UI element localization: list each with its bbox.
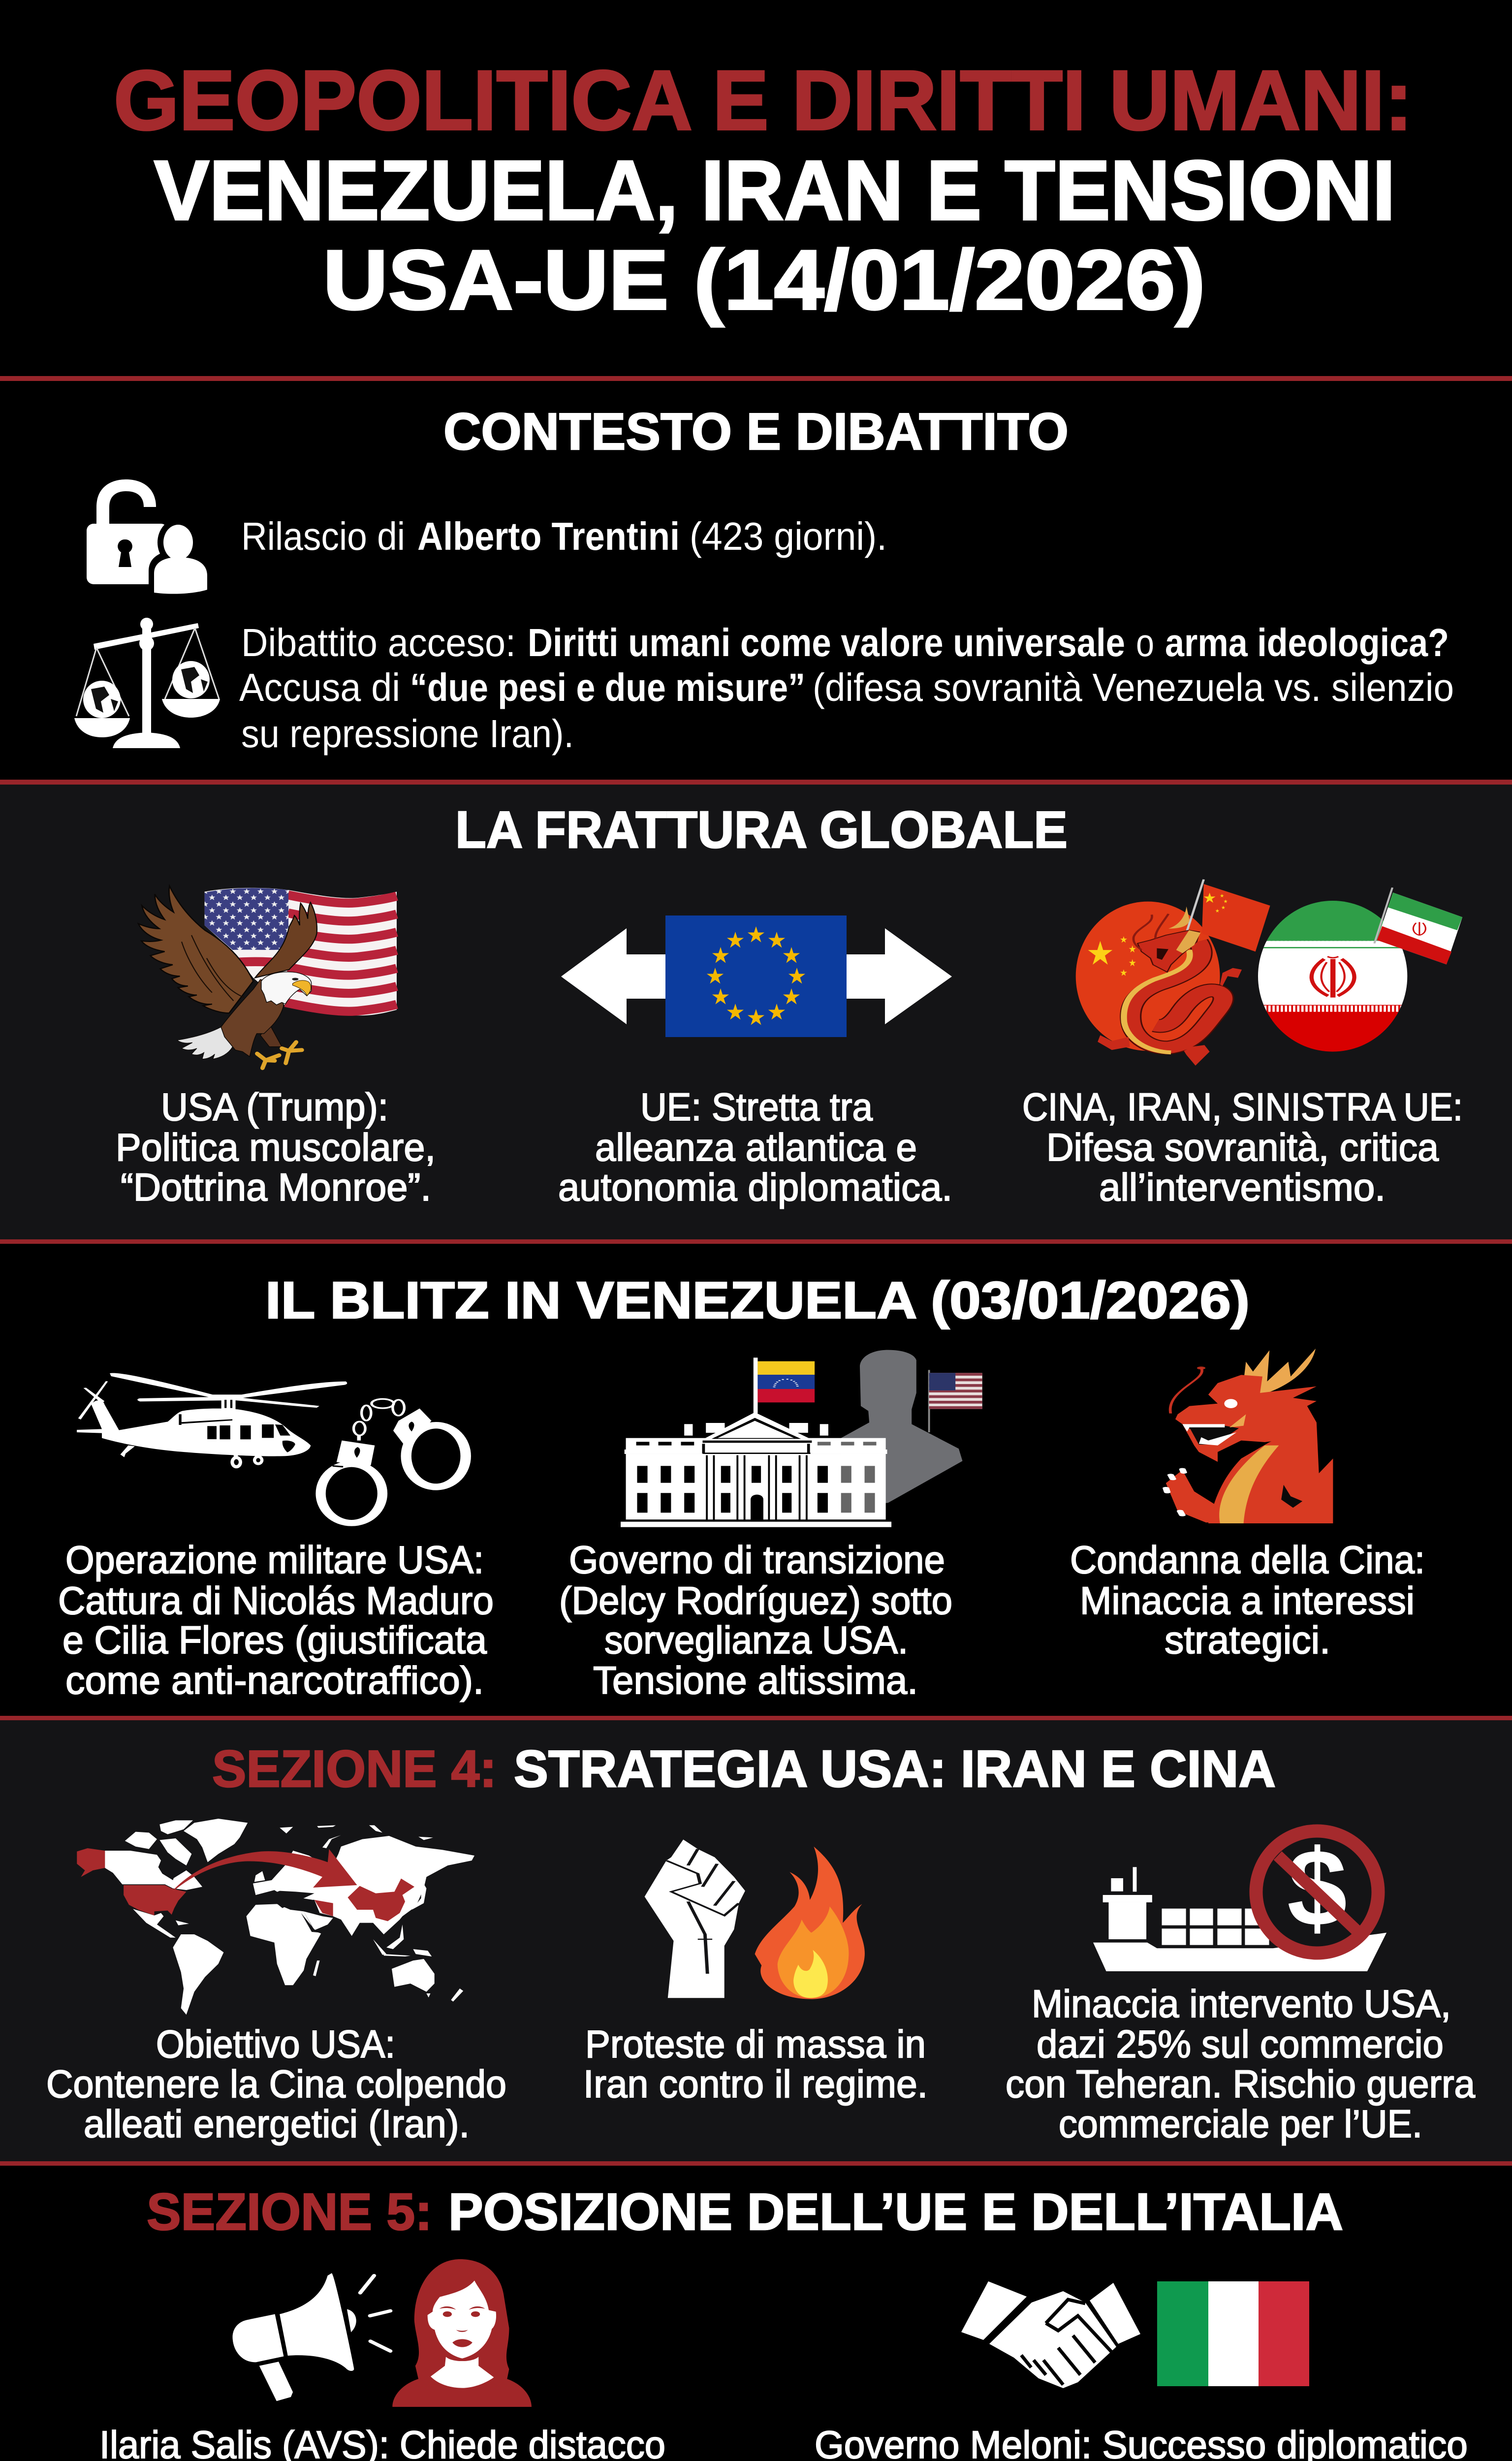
icon: open lock with person [87, 479, 213, 596]
icon: China dragon and Iran flags [1076, 880, 1462, 1066]
text: obiettivo USA: alleati energetici (Iran). [84, 2102, 470, 2145]
text: dibattito: Diritti umani come valore universale [528, 621, 1125, 664]
text: obiettivo USA [46, 2022, 506, 2145]
text: minaccia intervento: Minaccia intervento USA, [1032, 1982, 1451, 2025]
text: UE: autonomia diplomatica. [558, 1165, 952, 1209]
text: Cina Iran: CINA, IRAN, SINISTRA UE: [1022, 1085, 1463, 1129]
text: USA: USA (Trump): [161, 1085, 388, 1129]
text: UE: UE: Stretta tra [640, 1085, 873, 1129]
panel: contesto e dibattito [0, 381, 1512, 780]
heading: sezione 5: SEZIONE 5: [147, 2183, 432, 2241]
icon: helicopter and handcuffs [77, 1373, 466, 1523]
text: governo di transizione [559, 1538, 952, 1702]
title line 3: USA-UE (14/01/2026) [323, 233, 1205, 327]
text: governo di transizione: Tensione altissima. [593, 1658, 918, 1702]
text: condanna Cina [1070, 1538, 1425, 1662]
text: minaccia intervento: commerciale per l’UE. [1059, 2102, 1422, 2145]
text: UE [558, 1085, 952, 1209]
text: dibattito [239, 621, 1454, 756]
icon: scales with globes [74, 618, 220, 748]
panel: posizione UE e Italia [0, 2166, 1512, 2461]
text: governo di transizione: (Delcy Rodríguez) sotto [559, 1578, 952, 1622]
icon: Italian flag [1157, 2281, 1309, 2386]
text: operazione: e Cilia Flores (giustificata [63, 1618, 487, 1662]
heading: frattura: LA FRATTURA GLOBALE [455, 801, 1068, 859]
text: rilascio: Rilascio di [241, 514, 405, 558]
panel: title [114, 53, 1413, 327]
icon: container ship with prohibited dollar [1093, 1827, 1386, 1971]
icon: red dragon [1166, 1349, 1333, 1523]
text: proteste: Proteste di massa in [585, 2022, 926, 2066]
text: obiettivo USA: Obiettivo USA: [156, 2022, 395, 2066]
heading: blitz: IL BLITZ IN VENEZUELA (03/01/2026) [265, 1271, 1250, 1329]
title line 2: VENEZUELA, IRAN E TENSIONI [154, 143, 1395, 238]
text: UE: alleanza atlantica e [595, 1125, 917, 1169]
text: Cina Iran [1022, 1085, 1463, 1209]
icon: raised fist and flame [645, 1839, 865, 1999]
icon: world map with arrow [77, 1819, 474, 2015]
text: governo di transizione: Governo di transizione [569, 1538, 945, 1581]
text: governo di transizione: sorveglianza USA. [604, 1618, 908, 1662]
text: rilascio: (423 giorni). [690, 514, 887, 558]
text: dibattito: “due pesi e due misure” [410, 665, 805, 709]
heading: contesto: CONTESTO E DIBATTITO [443, 403, 1069, 461]
icon: eagle with US flag [138, 886, 397, 1068]
text: condanna Cina: strategici. [1165, 1618, 1330, 1662]
text: dibattito: su repressione Iran). [241, 712, 574, 756]
icon: double arrow and EU flag [561, 915, 952, 1037]
text: proteste: Iran contro il regime. [583, 2062, 928, 2106]
panel: il blitz in Venezuela [0, 1244, 1512, 1716]
text: proteste [583, 2022, 928, 2106]
text: rilascio: Alberto Trentini [417, 514, 680, 558]
text: dibattito: o [1136, 621, 1154, 664]
text: minaccia intervento: con Teheran. Rischio guerra [1006, 2062, 1475, 2106]
text: condanna Cina: Condanna della Cina: [1070, 1538, 1425, 1581]
panel: la frattura globale [0, 785, 1512, 1239]
text: dibattito: arma ideologica? [1165, 621, 1449, 664]
text: condanna Cina: Minaccia a interessi [1080, 1578, 1415, 1622]
text: operazione: Operazione militare USA: [65, 1538, 484, 1581]
text: obiettivo USA: Contenere la Cina colpendo [46, 2062, 506, 2106]
heading: sezione 5: POSIZIONE DELL’UE E DELL’ITALIA [448, 2183, 1343, 2241]
icon: container ship with prohibited dollar: $ [1287, 1827, 1347, 1949]
text: operazione: come anti-narcotraffico). [65, 1658, 484, 1702]
text: minaccia intervento [1006, 1982, 1475, 2145]
title line 1: GEOPOLITICA E DIRITTI UMANI: [114, 53, 1413, 148]
text: USA: Politica muscolare, [116, 1125, 436, 1169]
icon: megaphone and woman [232, 2259, 532, 2407]
text: operazione [58, 1538, 494, 1702]
text: Cina Iran: Difesa sovranità, critica [1046, 1125, 1439, 1169]
text: USA [116, 1085, 436, 1209]
heading: sezione 4: STRATEGIA USA: IRAN E CINA [514, 1740, 1276, 1798]
text: Cina Iran: all’interventismo. [1099, 1165, 1386, 1209]
text: rilascio [241, 514, 887, 558]
icon: handshake [961, 2281, 1140, 2388]
text: USA: “Dottrina Monroe”. [121, 1165, 431, 1209]
text: dibattito: (difesa sovranità Venezuela vs. silenzio [813, 665, 1454, 709]
heading: sezione 4: SEZIONE 4: [212, 1740, 497, 1798]
panel: strategia USA [0, 1720, 1512, 2161]
text: minaccia intervento: dazi 25% sul commercio [1037, 2022, 1444, 2066]
text: dibattito: Dibattito acceso: [241, 621, 516, 664]
text: operazione: Cattura di Nicolás Maduro [58, 1578, 494, 1622]
icon: White House, flags and silhouette [621, 1350, 982, 1527]
text: dibattito: Accusa di [239, 665, 400, 709]
